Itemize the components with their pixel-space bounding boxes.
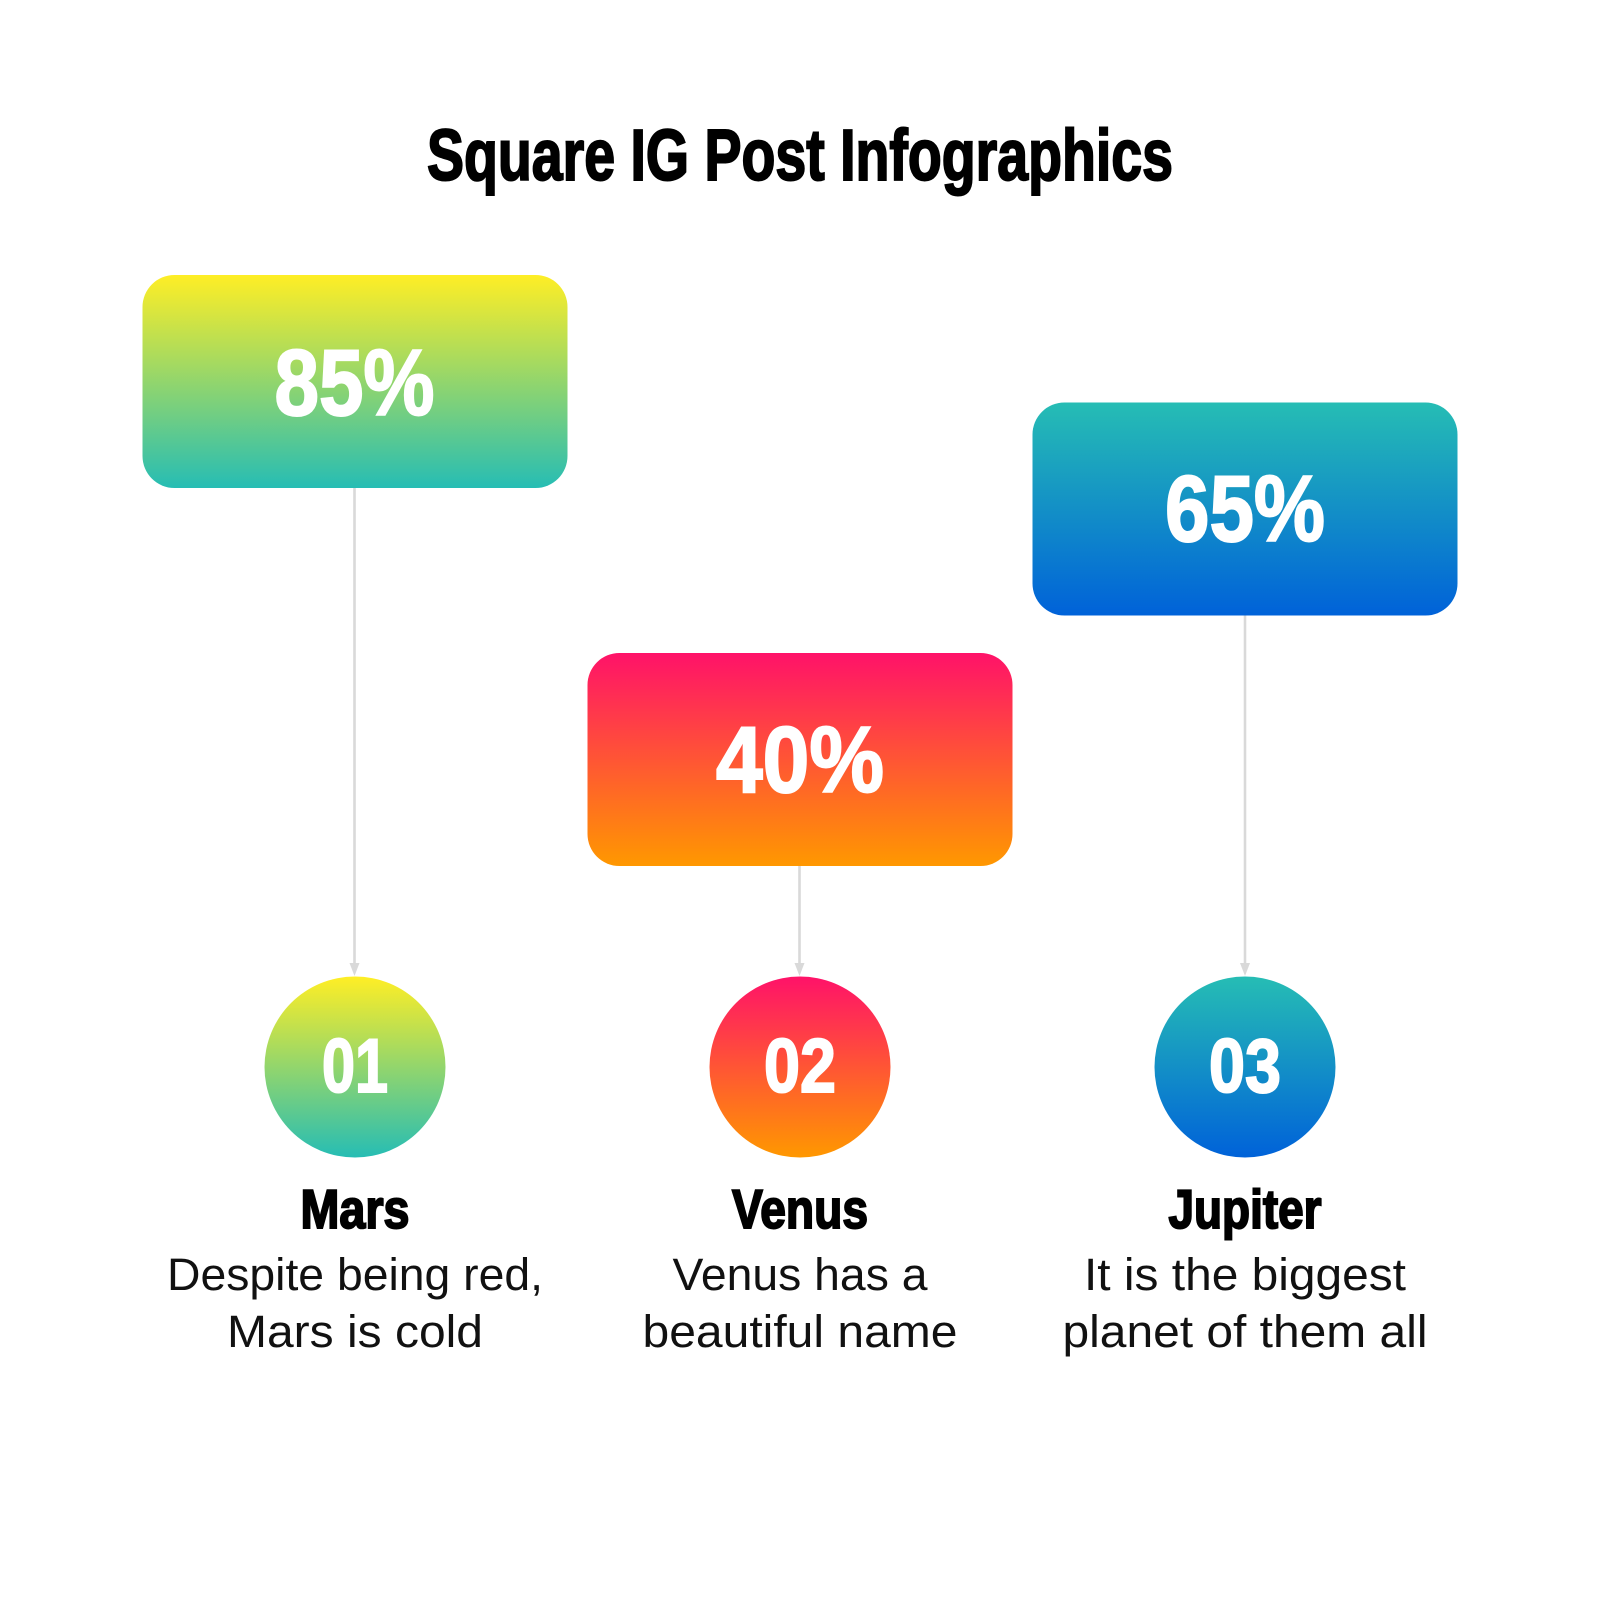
description: Mars (167, 1249, 543, 1357)
title: Square IG Post Infographics (427, 116, 1173, 196)
column: Jupiter (1032, 402, 1458, 1357)
number badge: 03: 03 (1209, 1024, 1281, 1109)
value box: 85% (142, 275, 568, 488)
description: Jupiter: It is the biggest (1084, 1249, 1407, 1300)
number badge: 02: 02 (764, 1024, 836, 1109)
number badge: 01: 01 (322, 1024, 388, 1109)
column: Mars (142, 275, 568, 1357)
description: Jupiter (1062, 1249, 1428, 1357)
arrow: Mars (350, 488, 360, 976)
description: Mars: Despite being red, (167, 1249, 543, 1300)
description: Venus: beautiful name (642, 1306, 958, 1357)
arrow: Venus (794, 865, 804, 976)
column: Venus (588, 653, 1012, 1357)
number badge: 02 (710, 976, 890, 1158)
description: Mars: Mars is cold (227, 1306, 483, 1357)
number badge: 01 (264, 976, 446, 1158)
arrow: Jupiter (1240, 614, 1250, 976)
heading: Jupiter: Jupiter (1168, 1178, 1322, 1240)
description: Jupiter: planet of them all (1062, 1306, 1428, 1357)
value box: 65% (1032, 402, 1458, 616)
heading: Mars: Mars (300, 1178, 410, 1240)
heading: Venus: Venus (732, 1178, 868, 1240)
value box: 40% (588, 653, 1012, 866)
description: Venus (642, 1249, 958, 1357)
description: Venus: Venus has a (672, 1249, 928, 1300)
value box: 40%: 40% (716, 707, 884, 812)
value box: 85%: 85% (274, 330, 434, 435)
number badge: 03 (1154, 976, 1336, 1158)
value box: 65%: 65% (1165, 456, 1325, 561)
